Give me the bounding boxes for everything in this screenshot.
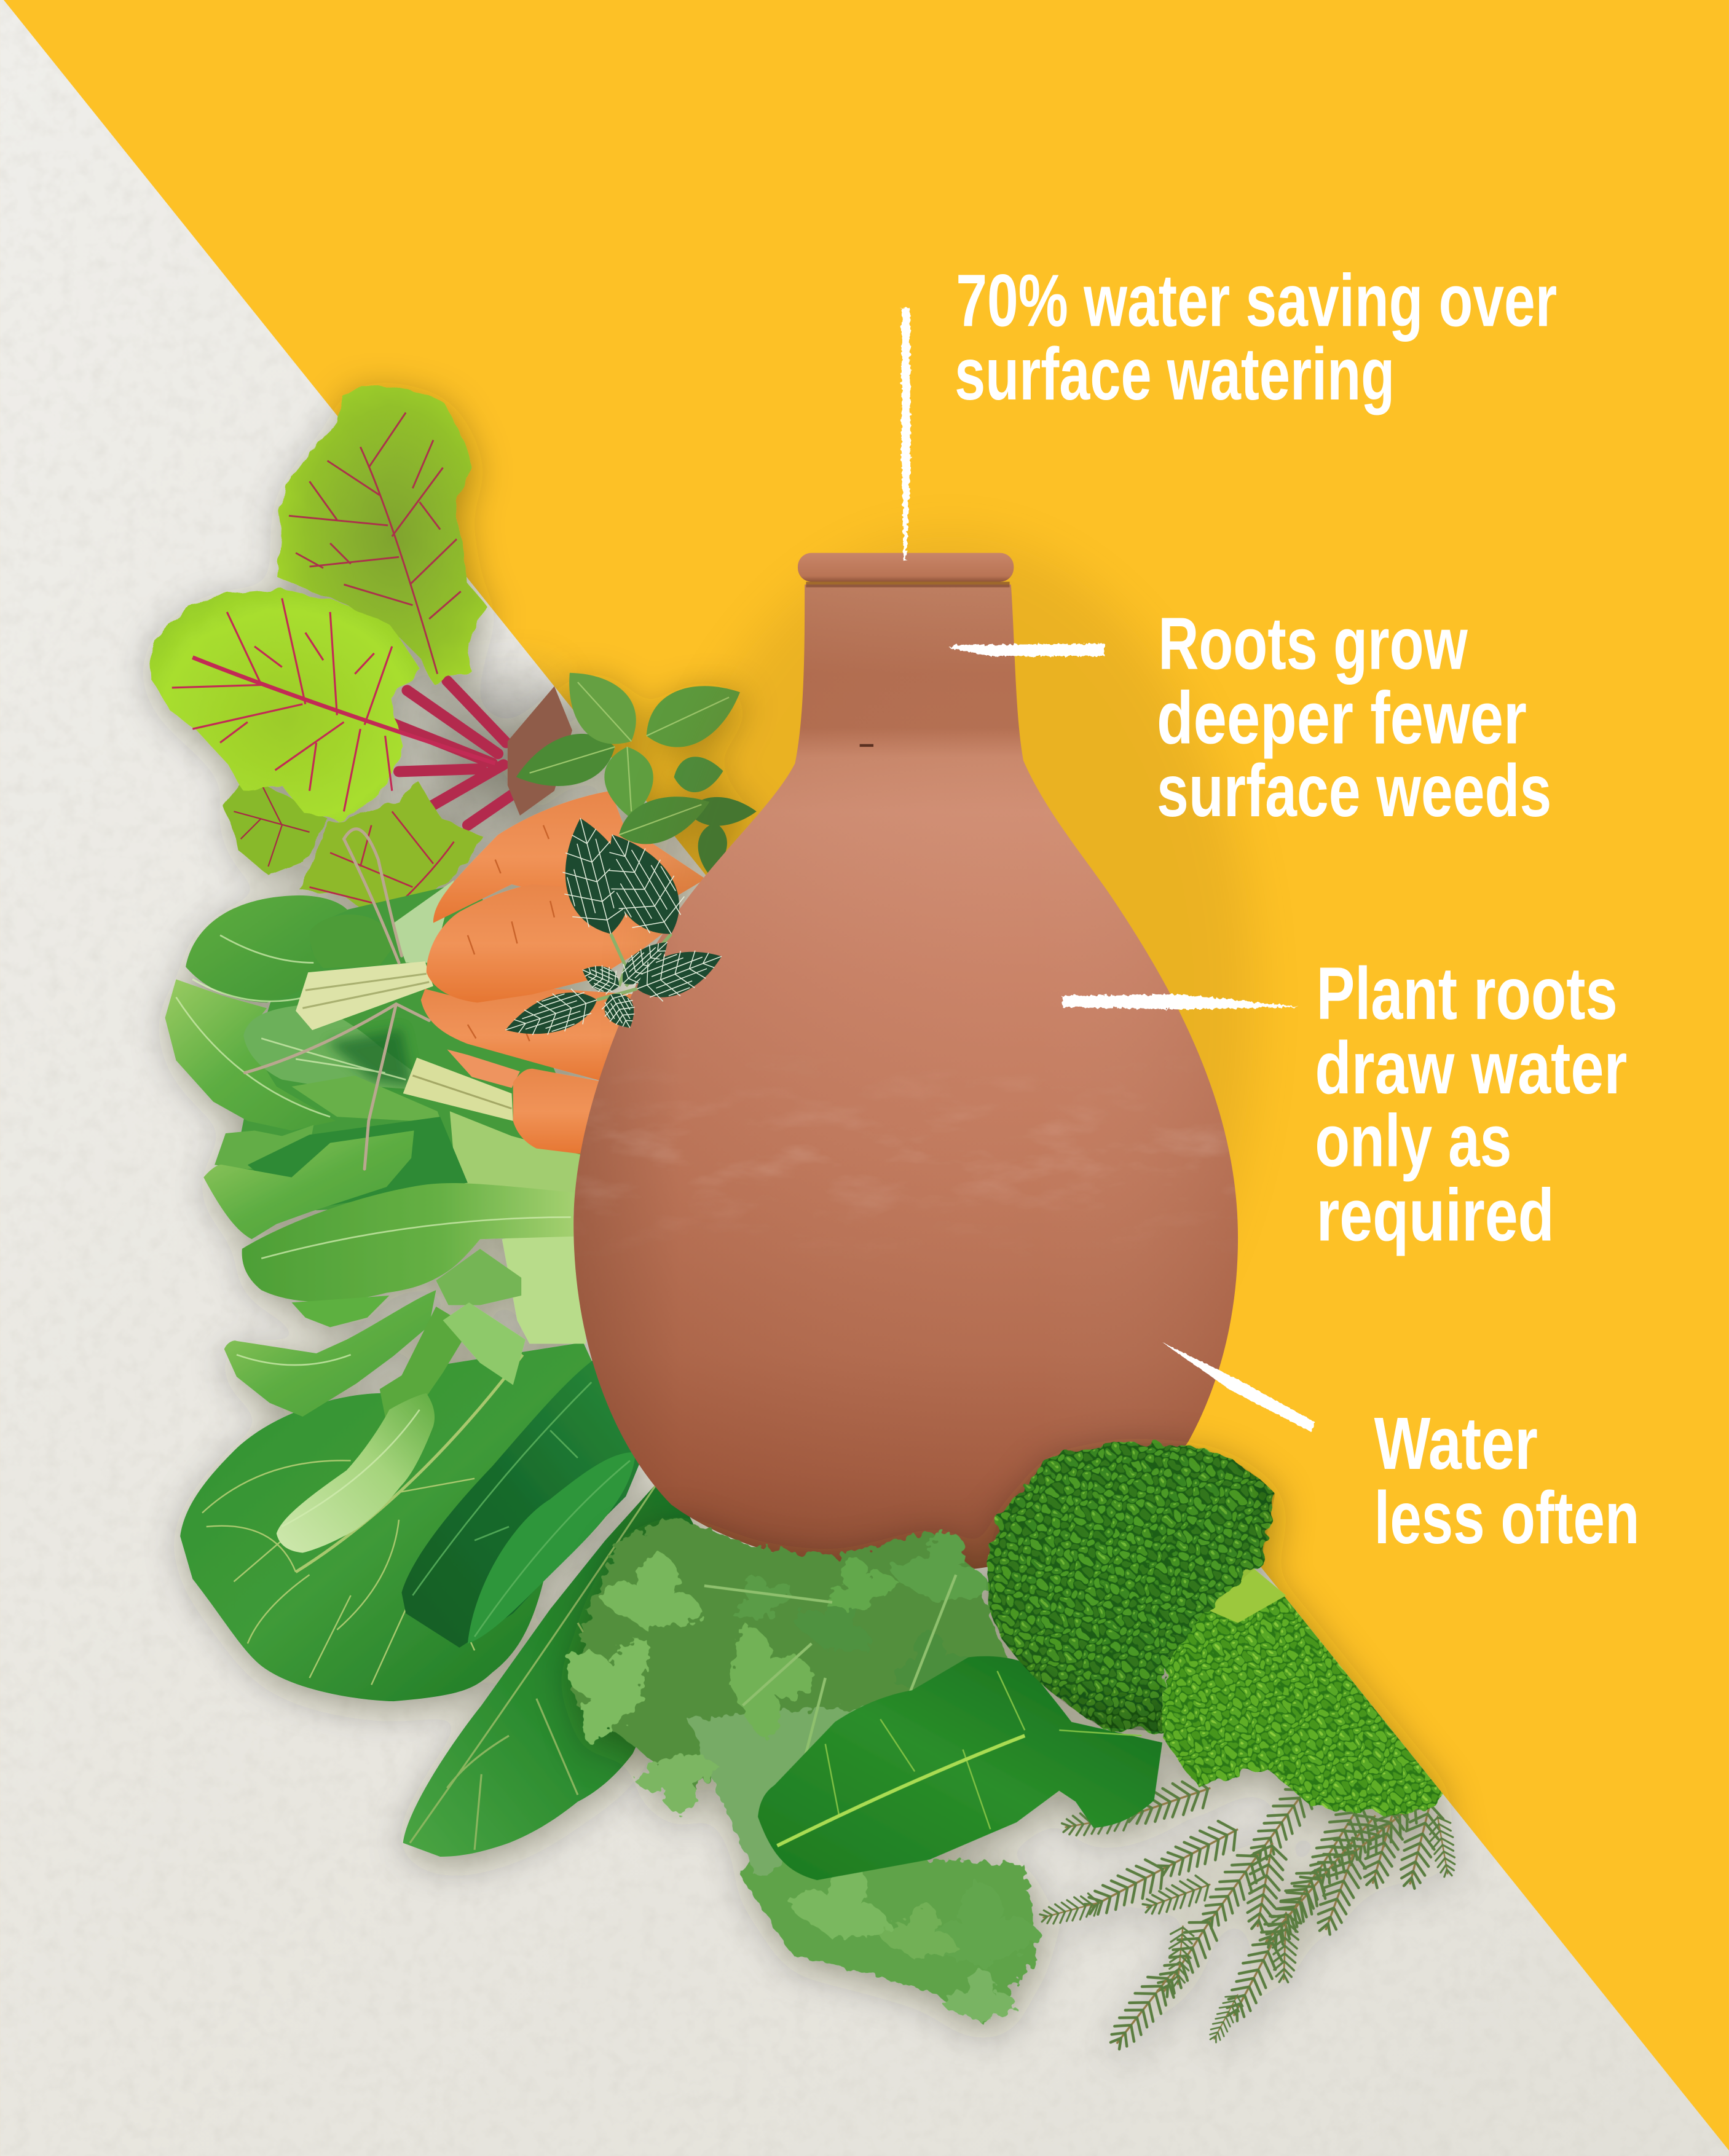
vegetable arrangement, behind pot [151,385,757,1857]
text: plant roots: required [1317,1174,1554,1257]
callout line: top [902,308,910,561]
thyme [1038,1772,1459,2056]
basil leaf bottom [612,782,717,855]
beet leaf: top [278,385,486,683]
dark fold leaf [401,1360,640,1648]
text: water less often: less often [1374,1476,1640,1559]
fittonia leaf 6 [577,958,624,999]
basil midribs [530,682,729,835]
text: water saving [955,259,1557,415]
beet leaf: lower right [300,780,481,923]
text: plant roots: only as [1315,1100,1511,1182]
carrot 4 [447,1049,520,1088]
bok choy leaf: right top [436,1249,521,1305]
cilantro mass upper [572,1516,1015,1791]
bok choy leaf: upper [186,895,348,1002]
bok choy pale base [450,1111,583,1210]
bok choy base mass [234,880,585,1210]
broccoli stalk [1199,1561,1286,1623]
wide dark leaf [180,1342,607,1701]
cilantro mass lower [740,1849,1037,2023]
twine [245,829,429,1169]
bright fold leaf [468,1452,636,1643]
cilantro stems [704,1575,956,1774]
basil [509,655,757,876]
pot lid [798,553,1014,582]
carrot bunch [296,791,706,1154]
text: roots grow: Roots grow [1158,602,1468,685]
fittonia leaf 3 [613,931,677,994]
fittonia sprig [499,809,730,1048]
fold highlights [412,1382,630,1637]
pot mark [860,744,873,747]
bok choy [165,880,586,1552]
terracotta pot [550,553,1266,1572]
beet stems [382,681,512,825]
basil leaf up [549,655,652,760]
carrot stub: upper [296,961,433,1030]
pot shadow on yellow [644,537,1254,1471]
carrot ridges [468,825,554,1041]
text: water less often [1374,1402,1640,1559]
callout line: lower [1162,1342,1315,1432]
bok choy leaf: small left [215,1125,313,1169]
bok choy leaf: inner top [310,915,392,968]
beet root [508,687,572,816]
beet leaf: large [151,589,495,821]
bok choy leaf: pale lower [277,1393,435,1552]
basil leaf back [688,797,757,826]
basil leaf right [635,667,752,761]
bok choy leaf: fold [203,1130,414,1239]
text: roots grow [1157,602,1551,832]
basil leaf left [509,723,622,800]
broccoli upper [987,1443,1275,1731]
carrot 2 [427,884,683,1002]
fittonia leaf 1 [547,809,644,943]
bok choy leaf: dark stem [380,1307,470,1430]
lower large dark leaves [180,1342,722,1857]
lid shadow on neck [806,582,1010,588]
bok choy pale stems [502,1224,586,1344]
beet greens [151,385,572,923]
cilantro leaf shapes [537,1522,1044,2022]
carrot 5 [513,1069,607,1154]
text: roots grow: deeper fewer [1157,677,1527,760]
broccoli shading [987,1443,1275,1731]
bok choy vein highlights [176,935,571,1527]
text: water saving: 70% water saving over [956,259,1557,342]
pot body [550,584,1266,1572]
bok choy leaf: right hanging [443,1302,526,1385]
bok choy leaf: left big [165,979,336,1130]
bok choy leaf: sprig left [224,1290,436,1417]
broccoli lower [1162,1594,1458,1813]
text: plant roots: Plant roots [1317,952,1618,1035]
carrot stub: lower [403,1058,513,1121]
cilantro [537,1516,1044,2023]
long dark leaf [403,1471,722,1857]
carrot 3 [421,989,637,1082]
text: roots grow: surface weeds [1157,749,1551,832]
text: water saving: surface watering [955,332,1395,415]
chard leaf [758,1656,1162,1880]
fittonia leaf 2 [585,818,699,950]
thyme sprigs [1038,1772,1459,2056]
pot weathering [580,1113,1226,1207]
fittonia stem [597,934,671,1000]
fittonia leaf 7 [597,986,644,1036]
dark gap [328,1029,412,1087]
basil leaf small [672,753,725,795]
bok choy leaf: centre [243,1004,411,1089]
callout line: neck [949,643,1105,656]
callout line: shoulder [1062,994,1300,1010]
basil leaf down [603,746,655,819]
bok choy leaf: large front [242,1183,573,1302]
bok choy leaf: darker middle [248,1117,468,1210]
fittonia leaf 4 [629,935,730,1010]
fittonia leaf 5 [499,981,603,1048]
text: plant roots [1315,952,1627,1257]
text: water less often: Water [1374,1402,1538,1485]
front vegetables [537,1443,1459,2056]
pale leaf by carrots [392,880,454,962]
basil leaf back low [695,820,730,876]
beet leaf: low left [224,777,330,876]
bok choy leaf: under front [291,1296,389,1327]
cilantro fade mass [688,1706,880,1878]
text: plant roots: draw water [1315,1026,1627,1109]
carrot 1 [433,791,706,923]
shadow behind beet stems [412,674,550,852]
bok choy leaf: mid sweep [291,1076,457,1163]
